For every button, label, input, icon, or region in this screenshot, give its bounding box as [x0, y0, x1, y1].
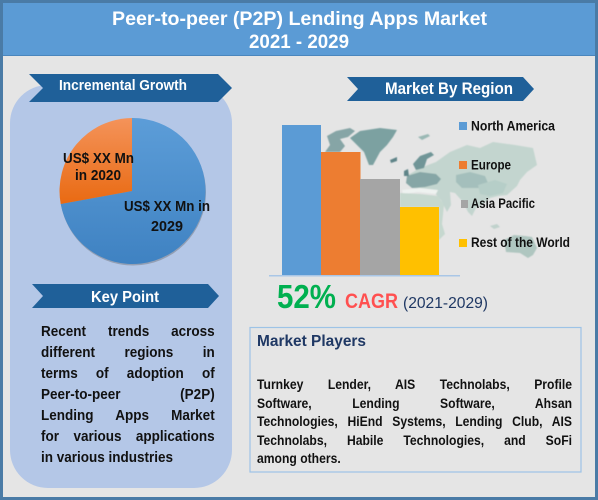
bar: Rest of the World [400, 207, 439, 275]
map: Britain [404, 169, 409, 176]
market players text: Software, Lending Software, Ahsan [257, 396, 572, 410]
key point text [41, 323, 215, 466]
market players text: Turnkey Lender, AIS Technolabs, Profile [257, 377, 572, 392]
label: 2020: US$ XX Mn [63, 151, 134, 167]
world map backdrop [325, 128, 537, 258]
map: Central Asia [456, 172, 488, 188]
pie chart [60, 118, 210, 266]
key point text: Lending Apps Market [41, 407, 215, 424]
slice: 2020 [60, 118, 132, 204]
bar: Europe [321, 152, 360, 275]
panel: market players box [250, 328, 581, 472]
map: Indonesia [490, 224, 500, 229]
CAGR callout: (2021-2029) [403, 295, 488, 312]
label: 2029 [124, 199, 210, 235]
key point text: in various industries [41, 449, 173, 466]
market players text [257, 377, 572, 466]
ribbon: Key Point [32, 284, 219, 308]
map: Mediterranean [402, 188, 438, 194]
market players text: Technolabs, Habile Technologies, and SoFi [257, 432, 572, 448]
map: Africa [400, 193, 445, 240]
key point text: for various applications [41, 428, 215, 445]
market players text: among others. [257, 451, 341, 466]
title line 2: 2021 - 2029 [249, 31, 349, 53]
map: Greenland [350, 128, 397, 165]
map: Svalbard [418, 134, 430, 140]
bar chart [269, 125, 460, 276]
market players text: Technologies, HiEnd Systems, Lending Club, AIS [257, 414, 572, 429]
label: 2020: in 2020 [75, 168, 121, 184]
header banner [3, 3, 595, 56]
legend [459, 118, 570, 250]
ribbon: Market By Region [347, 77, 534, 101]
label: 2020 [63, 151, 134, 184]
map: Australia [504, 235, 537, 258]
map: Eurasia [408, 142, 537, 216]
label: 2029: US$ XX Mn in [124, 199, 210, 215]
market players heading: Market Players [257, 333, 366, 350]
key point text: terms of adoption of [41, 365, 215, 382]
legend: North America: North America [471, 118, 555, 134]
CAGR callout: CAGR [345, 290, 398, 313]
legend: Asia Pacific: Asia Pacific [471, 196, 535, 211]
ribbon: Key Point: Key Point [91, 289, 159, 306]
CAGR callout: 52% [277, 278, 336, 315]
axis line [269, 275, 460, 276]
legend: Europe: Europe [471, 158, 511, 172]
ribbon: Incremental Growth [29, 74, 232, 102]
title line 1: Peer-to-peer (P2P) Lending Apps Market [112, 8, 488, 30]
key point text: different regions in [41, 344, 215, 361]
CAGR callout [277, 278, 488, 315]
key point text: Recent trends across [41, 323, 215, 340]
bar: Asia Pacific [360, 179, 400, 275]
slice: 2029 [61, 118, 206, 264]
map: Iceland [390, 157, 397, 163]
key point text: Peer-to-peer (P2P) [41, 386, 215, 403]
bar: North America [282, 125, 321, 275]
ribbon: Incremental Growth: Incremental Growth [59, 78, 187, 94]
map: Canada islands [325, 128, 355, 152]
map: Central Europe [406, 172, 441, 188]
map: Scandinavia [413, 152, 434, 170]
ribbon: Market By Region: Market By Region [385, 80, 513, 98]
legend: Rest of the World: Rest of the World [471, 235, 570, 250]
label: 2029: 2029 [151, 219, 183, 235]
panel: left background [10, 85, 232, 488]
map: China [478, 180, 507, 196]
